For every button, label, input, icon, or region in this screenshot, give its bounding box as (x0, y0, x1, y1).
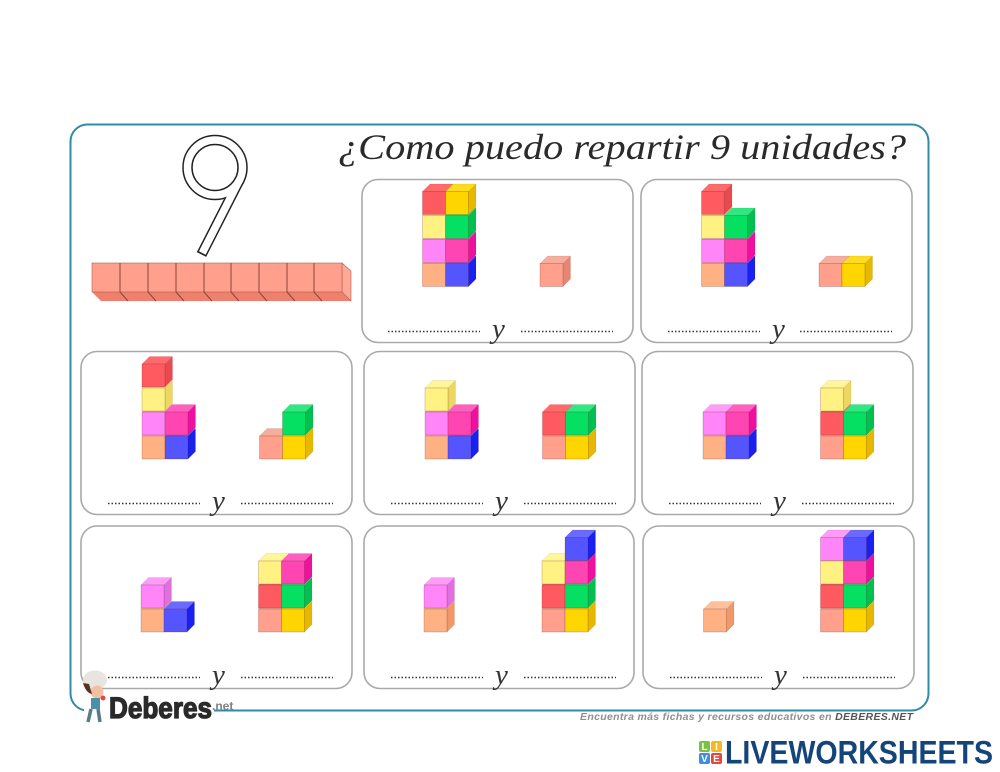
panel: 2 and 7 (364, 526, 634, 691)
cubes: group of two (424, 578, 454, 632)
answer line: y (771, 659, 787, 691)
cubes: group of six (258, 554, 312, 632)
outer frame (70, 124, 928, 710)
answer line: y (209, 659, 225, 691)
answer line: y (209, 485, 225, 517)
cubes: group of eight (820, 530, 874, 632)
answer line: y (492, 659, 508, 691)
logo: Deberes.net (83, 670, 233, 725)
panel: 8 and 1 (362, 180, 633, 345)
panel: 6 and 3 (81, 352, 352, 517)
panel: 4 and 5 (642, 352, 913, 517)
answer line: y (489, 313, 505, 345)
cubes: group of six (142, 356, 196, 459)
panel: 5 and 4 (364, 352, 635, 517)
answer line: y (769, 313, 785, 345)
panel: 3 and 6 (81, 526, 352, 691)
cubes: group of five (425, 380, 478, 459)
bar of nine unit cubes (92, 263, 351, 301)
wordmark: Deberes (109, 692, 212, 725)
cubes: group of seven (542, 530, 596, 632)
cubes: group of seven (702, 184, 755, 286)
icon: chef mascot (83, 670, 107, 722)
icon: live badge (699, 741, 722, 765)
numeral nine outline (188, 140, 242, 254)
answer line: y (770, 485, 786, 517)
answer line: y (492, 485, 508, 517)
icon: live badge: I (715, 742, 718, 753)
title: ¿Como puedo repartir 9 unidades? (338, 127, 906, 167)
cubes: group of two (819, 256, 872, 286)
cubes: group of three (260, 404, 313, 459)
cubes: group of eight (422, 184, 476, 286)
cubes: group of one (540, 256, 570, 286)
cubes: group of four (703, 404, 756, 459)
cubes: group of one (704, 602, 734, 632)
footer note: Encuentra más fichas y recursos educativos en DEBERES.NET (580, 711, 915, 723)
cubes: group of four (542, 404, 596, 459)
cubes: group of three (141, 578, 194, 632)
wordmark suffix: .net (212, 699, 233, 713)
cubes: group of five (820, 380, 874, 459)
panel: 7 and 2 (641, 180, 912, 345)
icon: live badge: E (713, 754, 720, 765)
icon: live badge: L (701, 742, 708, 753)
panel: 1 and 8 (643, 526, 914, 691)
icon: live badge: V (701, 754, 708, 765)
